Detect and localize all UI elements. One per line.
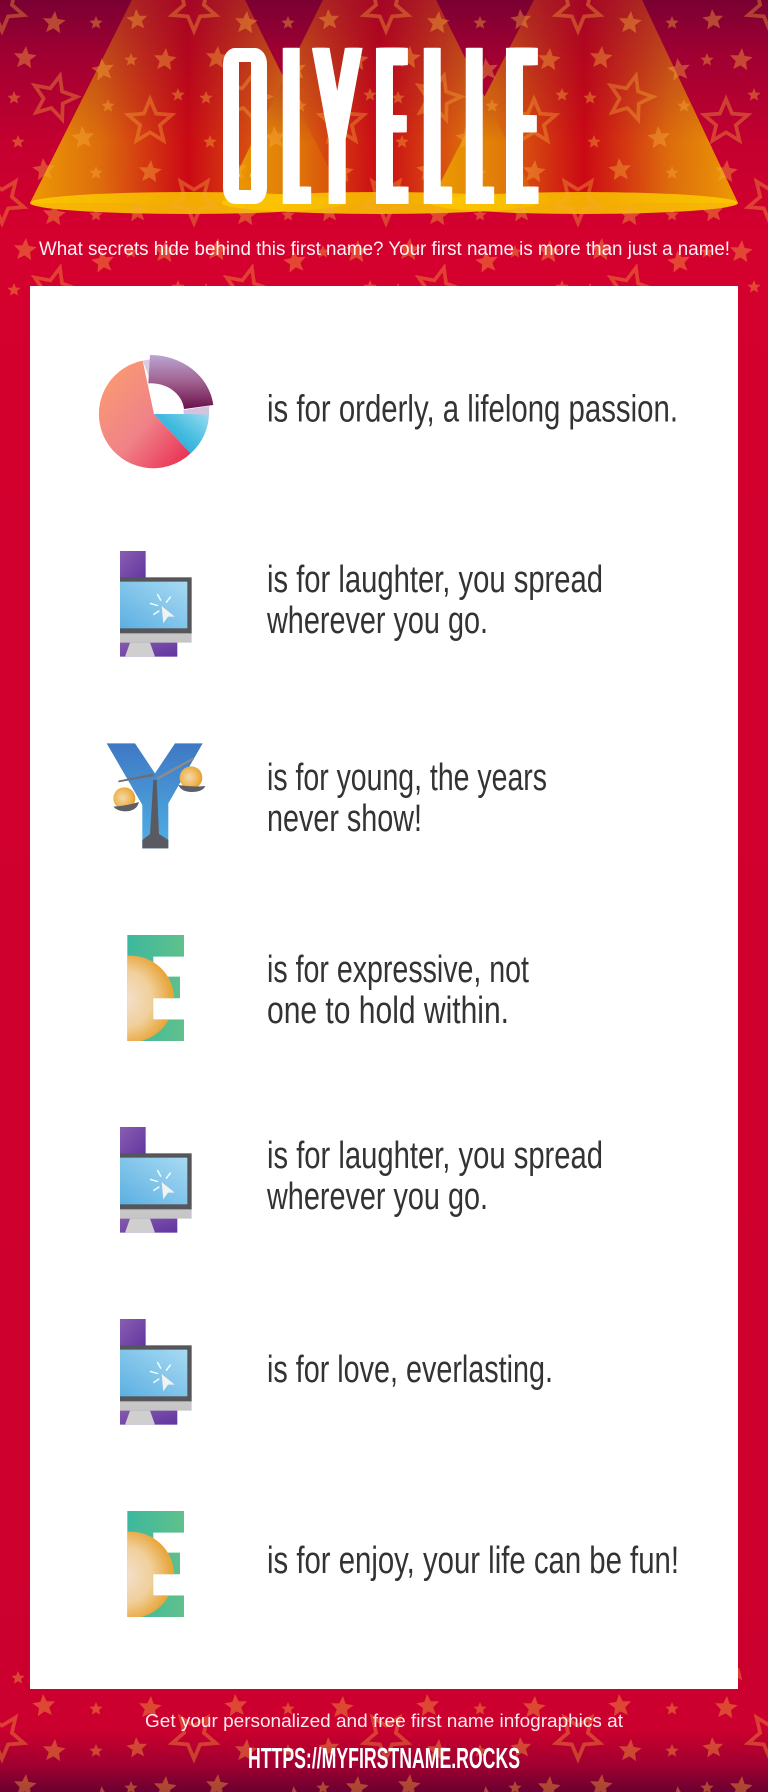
spotlights [30, 0, 738, 214]
icon: monitor letter L third [120, 1319, 192, 1425]
panel: letters [30, 286, 738, 1689]
text: Y line 2: never show! [267, 798, 422, 840]
title: L [428, 0, 447, 253]
title: L [470, 0, 489, 253]
text: L laughter second: is for laughter, you spread [267, 1135, 603, 1177]
star pattern: bottom [0, 1668, 768, 1792]
footer text: Get your personalized and free first name infographics at [145, 1711, 623, 1731]
icon: monitor letter L [120, 551, 192, 657]
text: E expressive: is for expressive, not [267, 949, 529, 991]
icon: pie chart letter O [99, 355, 213, 468]
text: L laughter: is for laughter, you spread [267, 559, 603, 601]
title [223, 0, 539, 253]
title: E [510, 0, 533, 253]
icon: monitor letter L second [120, 1127, 192, 1233]
star pattern: top [0, 0, 768, 300]
icon: scales letter Y [107, 743, 205, 848]
text: L laughter second line 2: wherever you go. [266, 1176, 488, 1218]
icon: coin letter E second [87, 1511, 185, 1618]
text: Y: is for young, the years [267, 757, 547, 799]
text: E expressive line 2: one to hold within. [267, 990, 509, 1032]
footer url: HTTPS://MYFIRSTNAME.ROCKS [248, 1743, 520, 1775]
icon: coin letter E [87, 935, 185, 1042]
title: E [380, 0, 403, 253]
title: L [287, 0, 306, 253]
text: L laughter line 2: wherever you go. [266, 600, 488, 642]
text: L love: is for love, everlasting. [267, 1349, 553, 1391]
title: Y [316, 0, 359, 253]
tagline: What secrets hide behind this first name? Your first name is more than just a name! [39, 239, 730, 260]
title: O [227, 0, 263, 253]
